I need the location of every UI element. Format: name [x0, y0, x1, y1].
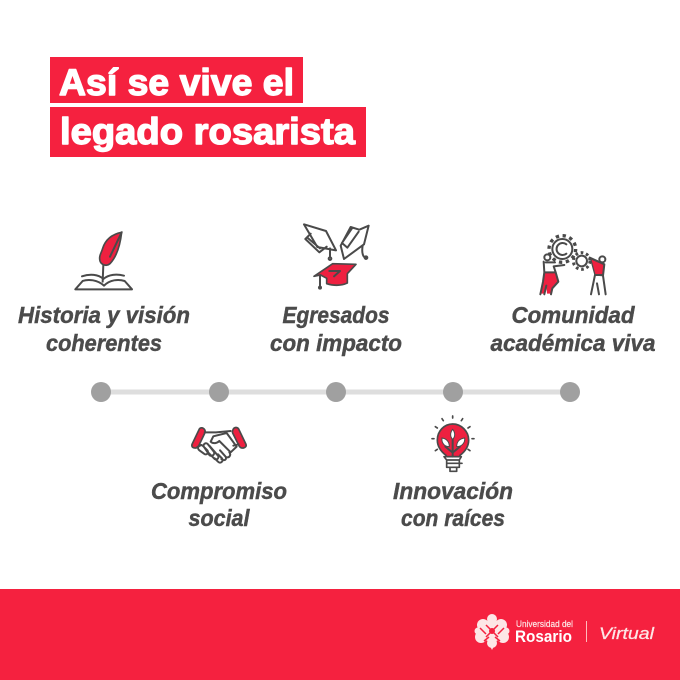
- label: Historia y visión coherentes: coherentes: [46, 330, 162, 356]
- logo: Universidad del Rosario Virtual: Rosario: [515, 628, 572, 646]
- title: Así se vive el: [59, 62, 294, 103]
- label: Comunidad académica viva: [490, 302, 656, 356]
- label: Compromiso social: [151, 478, 287, 531]
- label: Historia y visión coherentes: [18, 302, 190, 356]
- timeline: [91, 382, 580, 402]
- label: Compromiso social: social: [188, 505, 250, 531]
- footer band: [0, 589, 680, 680]
- logo: Universidad del Rosario Virtual: [474, 614, 655, 650]
- label: Comunidad académica viva: Comunidad: [512, 302, 635, 328]
- label: Egresados con impacto: [270, 302, 402, 356]
- logo: Universidad del Rosario Virtual: Virtual: [599, 624, 655, 643]
- icon: light bulb with plant: [432, 416, 474, 471]
- icon: graduation caps: [304, 224, 369, 290]
- label: Comunidad académica viva: académica viva: [490, 330, 656, 356]
- icon: handshake: [192, 427, 246, 463]
- label: Innovación con raíces: [393, 478, 513, 531]
- icon: university crest: [474, 614, 510, 650]
- label: Egresados con impacto: Egresados: [282, 302, 390, 328]
- title: legado rosarista: [60, 111, 355, 152]
- icon: people turning gears: [540, 236, 606, 294]
- label: Historia y visión coherentes: Historia y visión: [18, 302, 190, 328]
- label: Innovación con raíces: Innovación: [393, 478, 513, 504]
- label: Compromiso social: Compromiso: [151, 478, 287, 504]
- label: Egresados con impacto: con impacto: [270, 330, 402, 356]
- label: Innovación con raíces: con raíces: [401, 505, 505, 531]
- logo: Universidad del Rosario Virtual: Universidad del: [516, 619, 573, 630]
- icon: feather and open book: [75, 232, 132, 289]
- title: [50, 57, 366, 157]
